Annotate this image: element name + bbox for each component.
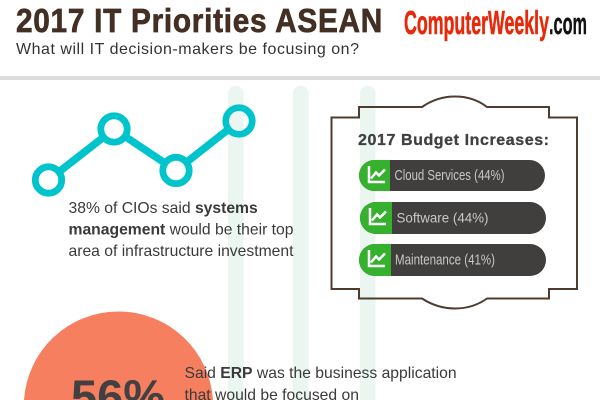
bar: software (360, 202, 546, 234)
ERP text (184, 365, 457, 400)
systems management text (68, 200, 294, 260)
systems management text: 38% of CIOs said systems (68, 200, 258, 217)
ERP text: Said ERP was the business application (184, 365, 457, 382)
circle: 56% stat (24, 311, 213, 400)
subtitle: What will IT decision-makers be focusing on? (16, 41, 359, 58)
systems management text: area of infrastructure investment (68, 243, 294, 260)
systems management text: management would be their top (68, 222, 294, 238)
bar: maintenance (359, 244, 546, 276)
title: 2017 IT Priorities ASEAN (16, 3, 383, 40)
bar: maintenance: Maintenance (41%) (395, 252, 495, 268)
panel frame (332, 96, 577, 308)
icon: line chart (35, 108, 252, 193)
bar: cloud services (359, 160, 545, 191)
bar: software: Software (44%) (396, 210, 488, 226)
panel heading: 2017 Budget Increases: (358, 132, 549, 149)
panel: budget increases (332, 96, 577, 308)
bar: cloud services: Cloud Services (44%) (394, 168, 504, 184)
